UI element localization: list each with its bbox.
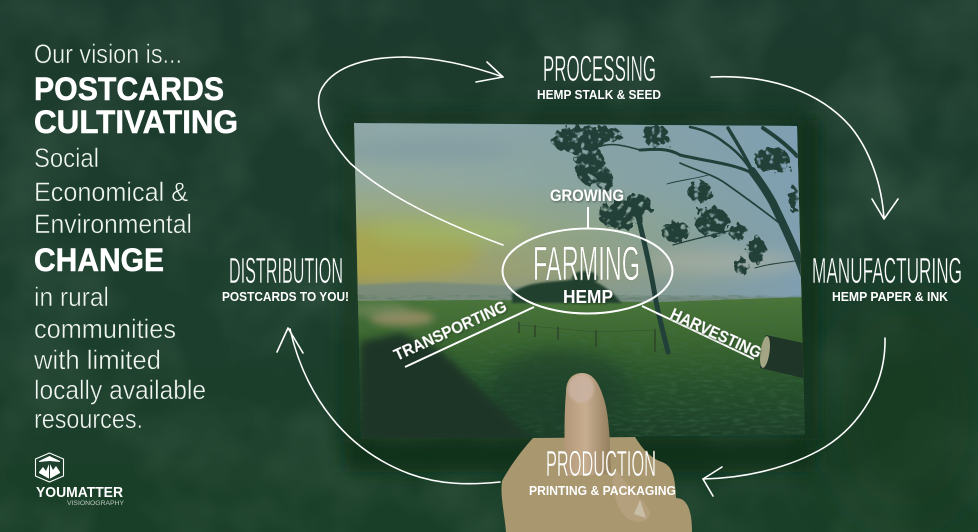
arrow: production to distribution (277, 328, 500, 484)
label: distribution (222, 250, 349, 304)
postcard photo of farm landscape (354, 123, 805, 439)
label: production: PRODUCTION (546, 443, 656, 484)
YouMatter logo: YOUMATTER (36, 485, 123, 501)
label: processing (537, 48, 661, 102)
spoke: harvesting: HARVESTING (667, 305, 764, 362)
arrow: farming to processing (319, 57, 503, 245)
left vision statement (33, 39, 238, 434)
label: production (529, 443, 676, 498)
central farming hemp diagram (391, 187, 764, 367)
spoke: transporting: TRANSPORTING (391, 298, 510, 365)
spoke: growing (550, 187, 624, 228)
left vision statement: Social (34, 143, 99, 173)
left vision statement: with limited (33, 345, 161, 375)
hand holding the postcard (501, 373, 692, 532)
label: processing: HEMP STALK & SEED (537, 88, 661, 102)
logo icon: hexagon with mountains (36, 453, 64, 482)
central farming hemp diagram: FARMING (533, 238, 640, 291)
YouMatter logo (36, 453, 124, 507)
text: DISTRIBUTION (229, 250, 343, 291)
left vision statement: Economical & (34, 177, 188, 207)
spoke: harvesting (642, 305, 764, 362)
left vision statement: Environmental (34, 209, 192, 239)
tree stump (760, 335, 803, 378)
left vision statement: communities (34, 314, 176, 344)
label: manufacturing: HEMP PAPER & INK (832, 290, 948, 304)
ellipse (502, 228, 672, 314)
trees (590, 127, 806, 352)
label: distribution: POSTCARDS TO YOU! (222, 290, 349, 304)
YouMatter logo: VISIONOGRAPHY (67, 501, 124, 507)
fence (519, 322, 655, 352)
heading: hemp: HEMP (563, 287, 613, 307)
left vision statement: CHANGE (34, 242, 164, 278)
spoke: growing: GROWING (550, 187, 624, 205)
left vision statement: CULTIVATING (34, 104, 238, 140)
left vision statement: resources. (34, 404, 143, 434)
left vision statement: POSTCARDS (34, 71, 224, 107)
label: production: PRINTING & PACKAGING (529, 484, 676, 498)
left vision statement: in rural (34, 282, 109, 312)
arrow: manufacturing to production (703, 338, 885, 496)
text: PROCESSING (543, 48, 656, 89)
left vision statement: Our vision is... (34, 39, 182, 69)
left vision statement: locally available (34, 375, 206, 405)
arrow: processing to manufacturing (711, 77, 898, 219)
